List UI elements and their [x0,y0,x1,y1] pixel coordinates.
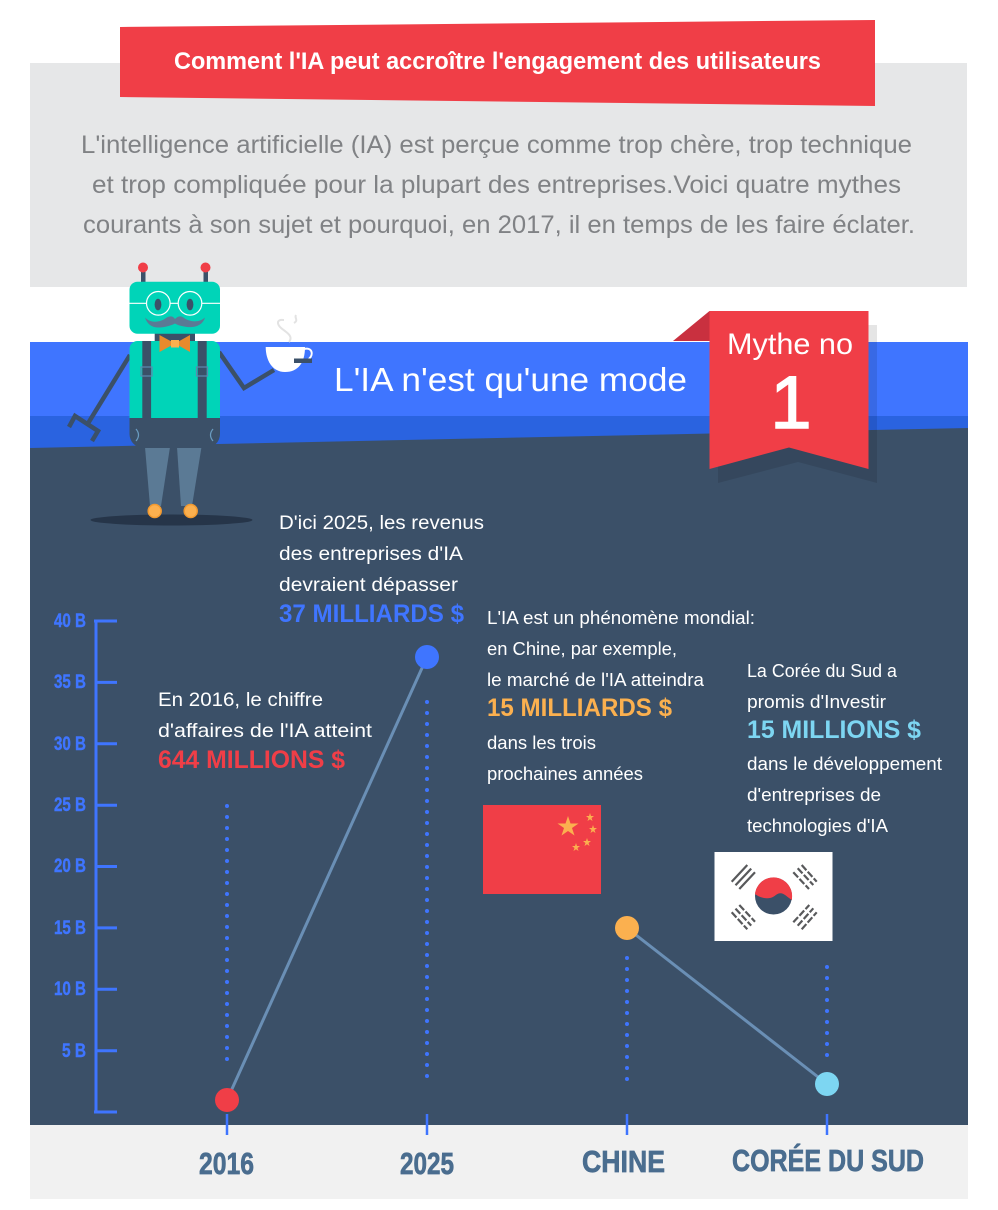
callout: 2025 revenue: des entreprises d'IA [279,543,463,565]
y axis: 15 B [54,918,86,939]
myth header band [30,342,968,450]
callout: 2025 revenue [279,512,484,628]
callout: 2025 revenue: devraient dépasser [279,574,459,596]
ribbon: myth number [673,311,877,483]
callout: China: prochaines années [487,763,643,784]
ribbon: myth number: Mythe no [727,328,853,361]
x axis labels: 2016 [199,1146,254,1181]
myth heading: L'IA n'est qu'une mode [334,361,687,398]
intro panel [30,63,967,287]
robot bow tie [160,335,190,352]
callout: South Korea: promis d'Investir [747,691,886,712]
robot feet [148,504,197,518]
y axis: 5 B [62,1041,86,1062]
icon: flag of South Korea [714,852,832,941]
robot head [130,282,220,334]
callout: South Korea: technologies d'IA [747,815,889,836]
callout: South Korea: d'entreprises de [747,784,881,805]
data points [215,645,839,1112]
intro text [81,131,915,239]
callout: China: 15 MILLIARDS $ [487,694,672,722]
callout: 2016 revenue: 644 MILLIONS $ [158,746,345,774]
callout: 2016 revenue: d'affaires de l'IA atteint [158,720,373,742]
robot antennas [138,262,210,283]
robot shorts [130,418,220,448]
title banner: Comment l'IA peut accroître l'engagement des utilisateurs [174,48,821,75]
x axis labels: CORÉE DU SUD [732,1143,924,1178]
x axis labels: 2025 [400,1146,454,1181]
callout: 2016 revenue [158,689,373,774]
dark chart panel [30,428,968,1125]
robot arms [69,352,274,441]
x axis ticks [227,1114,827,1135]
ribbon: myth number: 1 [770,361,812,444]
y axis: 30 B [54,734,86,755]
intro text: et trop compliquée pour la plupart des entreprises.Voici quatre mythes [92,171,901,199]
callout: China: le marché de l'IA atteindra [487,669,705,690]
robot suspenders [136,341,213,441]
y axis: 25 B [54,795,86,816]
y axis: 35 B [54,672,86,693]
callout: 2025 revenue: D'ici 2025, les revenus [279,512,484,534]
intro text: courants à son sujet et pourquoi, en 2017, il en temps de les faire éclater. [83,211,915,239]
callout: China: dans les trois [487,732,596,753]
y axis: 40 B [54,611,86,632]
title banner [120,20,875,106]
callout: South Korea: La Corée du Sud a [747,660,898,681]
footer strip [30,1125,968,1199]
robot body [130,341,220,418]
callout: 2016 revenue: En 2016, le chiffre [158,689,323,711]
x axis labels: CHINE [582,1144,665,1179]
trend lines [227,657,827,1100]
callout: China: L'IA est un phénomène mondial: [487,607,755,628]
robot shadow [90,514,252,526]
y axis: 10 B [54,979,86,1000]
dotted guide lines [227,702,827,1082]
x axis labels [199,1143,924,1181]
robot illustration [69,262,312,526]
robot legs [145,447,202,506]
callout: South Korea [747,660,942,836]
callout: China [487,607,755,784]
intro text: L'intelligence artificielle (IA) est perçue comme trop chère, trop technique [81,131,912,159]
callout: China: en Chine, par exemple, [487,638,677,659]
callout: South Korea: 15 MILLIONS $ [747,716,921,744]
coffee cup [266,315,312,372]
icon: flag of China [483,805,601,894]
callout: 2025 revenue: 37 MILLIARDS $ [279,600,464,628]
y axis: 20 B [54,856,86,877]
y axis [54,611,117,1112]
robot neck [155,333,195,343]
callout: South Korea: dans le développement [747,753,942,774]
